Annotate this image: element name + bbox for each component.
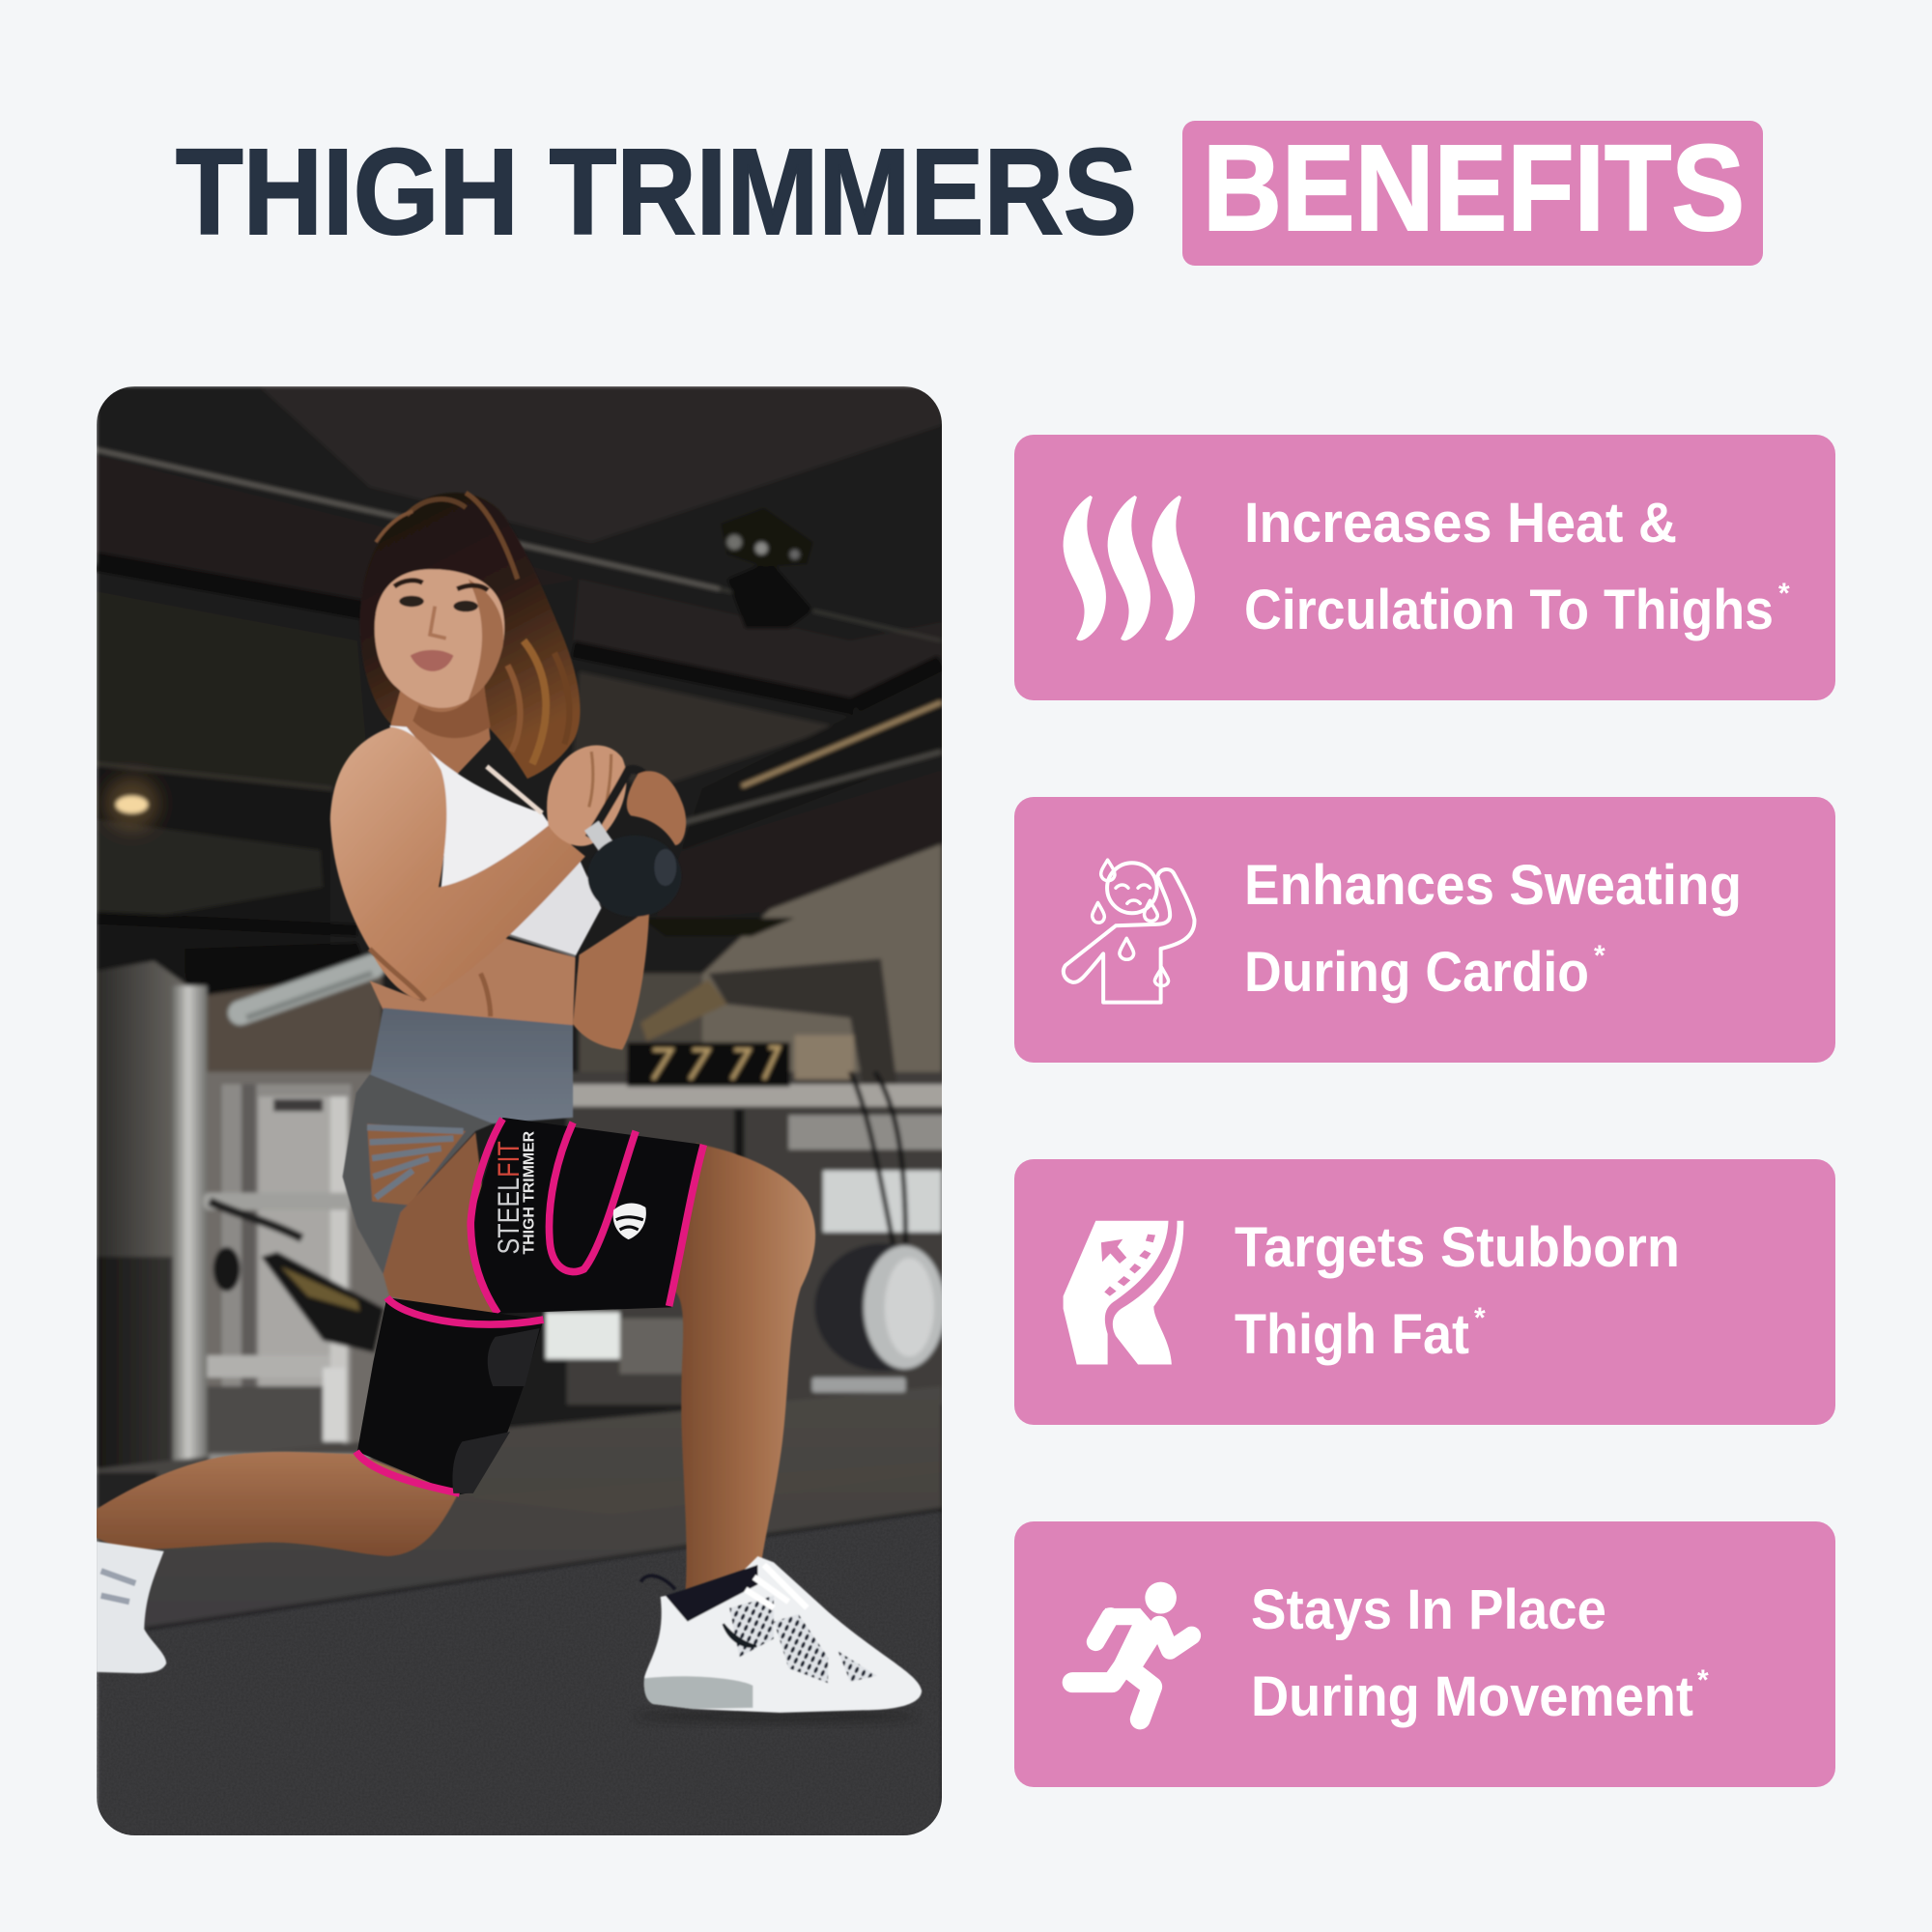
ceiling lamp glow	[104, 777, 159, 831]
text: enhances sweating during cardio	[1244, 854, 1742, 1004]
ceiling fixtures	[721, 508, 813, 629]
right back arm and forearm	[573, 909, 649, 1050]
gym mid zone	[197, 1072, 407, 1479]
icon: running person	[1072, 1582, 1192, 1719]
text: stays in place during movement: During Movement	[1251, 1665, 1693, 1728]
hand on kettlebell	[627, 771, 686, 845]
thigh trimmer lower	[356, 1297, 543, 1494]
skin through cutouts	[367, 1123, 466, 1205]
thigh trimmer upper: THIGH TRIMMER	[521, 1131, 537, 1254]
text: targets stubborn thigh fat: Thigh Fat	[1235, 1303, 1469, 1366]
icon: heat waves	[1064, 496, 1195, 640]
floor contact shadow	[647, 1710, 904, 1724]
panel: heat and circulation	[1014, 435, 1835, 700]
text: enhances sweating during cardio: During Cardio	[1244, 941, 1589, 1004]
text: targets stubborn thigh fat: Targets Stubborn	[1235, 1216, 1680, 1279]
bra lower	[510, 861, 603, 956]
photo: woman lunging with kettlebell wearing thigh trimmers	[97, 386, 942, 1835]
text: increases heat and circulation to thighs: *	[1778, 578, 1790, 610]
front leg	[669, 1144, 815, 1596]
floor speckle	[97, 1672, 99, 1799]
shorts back panel	[343, 1074, 493, 1274]
title	[176, 120, 1763, 266]
rear thigh skin	[384, 1132, 499, 1324]
floor	[97, 1389, 942, 1630]
icon: sweating person	[1064, 860, 1194, 1003]
panel: enhances sweating	[1014, 797, 1835, 1063]
text: increases heat and circulation to thighs	[1244, 492, 1790, 641]
icon: hip and thigh contour	[1064, 1221, 1183, 1364]
duct	[241, 966, 373, 1012]
text: stays in place during movement	[1251, 1578, 1709, 1728]
kettlebell handle	[589, 770, 651, 838]
text: targets stubborn thigh fat: *	[1474, 1302, 1486, 1334]
back leg	[96, 1452, 458, 1556]
kettlebell	[587, 836, 681, 917]
elliptical machine	[814, 1242, 895, 1372]
text: enhances sweating during cardio: *	[1594, 940, 1605, 972]
bra upper	[389, 725, 552, 887]
text: stays in place during movement: *	[1697, 1664, 1709, 1696]
shorts waistband	[370, 1008, 573, 1123]
text: increases heat and circulation to thighs: Increases Heat &	[1244, 492, 1677, 554]
fist	[547, 745, 627, 846]
hair	[359, 493, 581, 779]
panel: stays in place	[1014, 1521, 1835, 1787]
face	[375, 569, 504, 708]
panel: targets thigh fat	[1014, 1159, 1835, 1425]
text: enhances sweating during cardio: Enhances Sweating	[1244, 854, 1742, 917]
front arm	[330, 727, 585, 1001]
text: increases heat and circulation to thighs: Circulation To Thighs	[1244, 579, 1774, 641]
title: thigh trimmers: THIGH TRIMMERS	[176, 124, 1137, 260]
neck	[389, 686, 491, 775]
thigh trimmer upper	[470, 1118, 703, 1314]
text: stays in place during movement: Stays In Place	[1251, 1578, 1606, 1641]
thigh trimmer upper: STEELFIT	[491, 1141, 526, 1254]
title highlight: benefits: BENEFITS	[1203, 120, 1745, 256]
abdomen	[370, 936, 576, 1026]
text: targets stubborn thigh fat	[1235, 1216, 1680, 1366]
rear shoe	[96, 1542, 166, 1673]
front shoe	[640, 1556, 922, 1713]
machines left	[96, 961, 187, 1466]
